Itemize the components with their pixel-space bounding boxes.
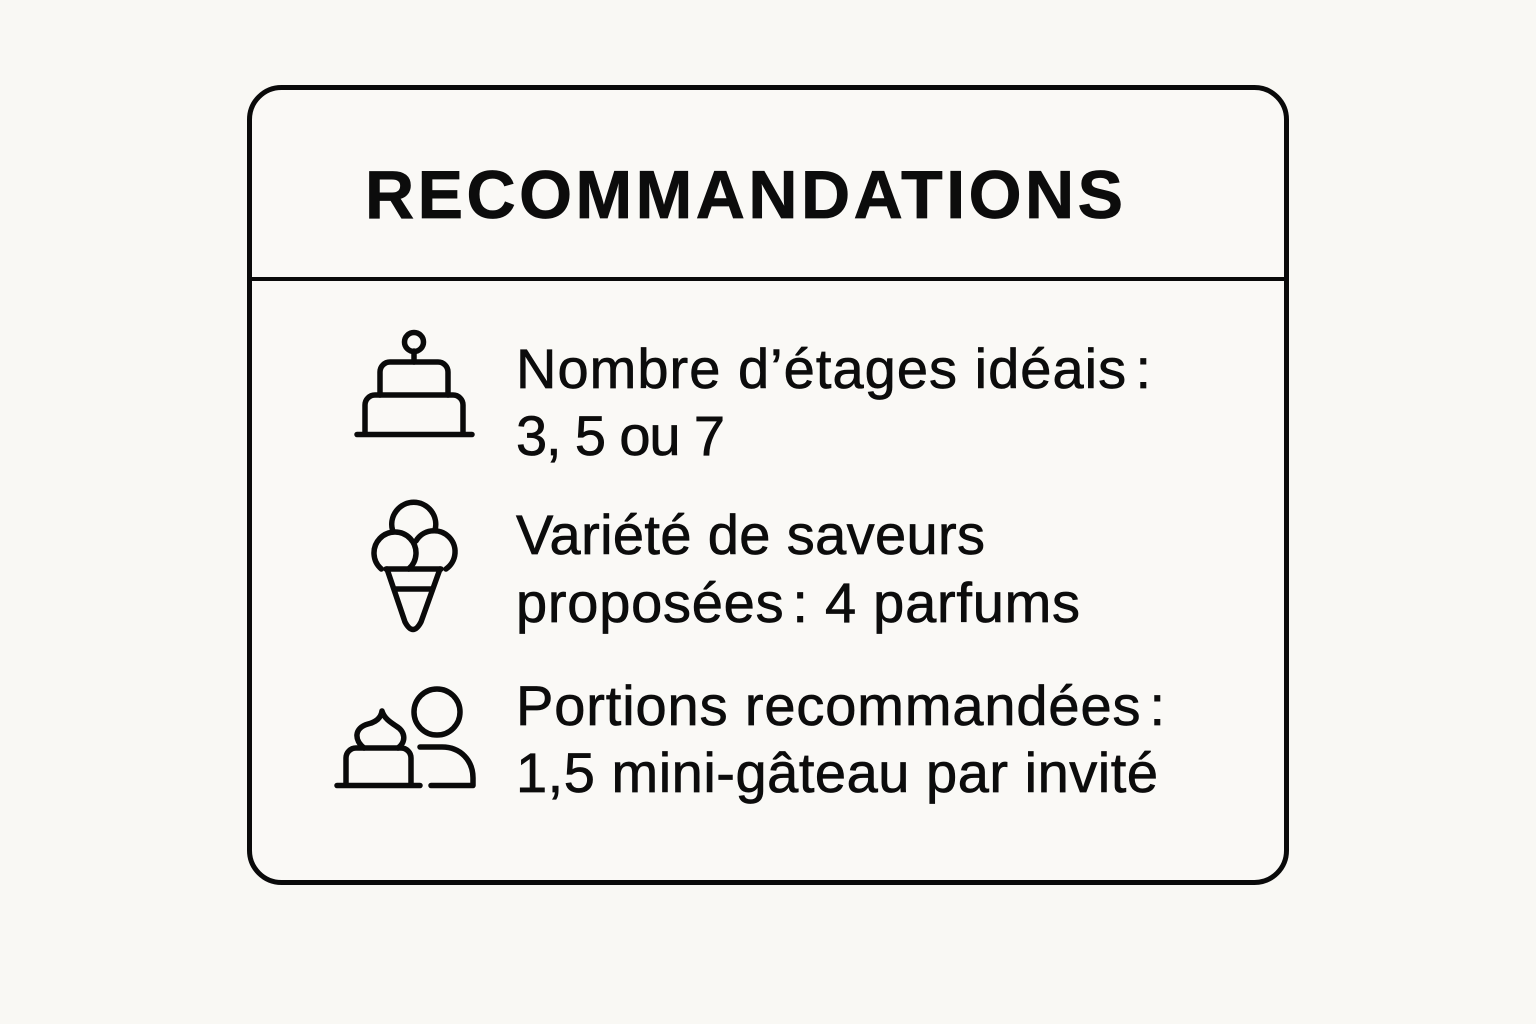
text: flavour variety: Variété de saveurs (516, 503, 985, 566)
text: number of tiers: Nombre d’étages idéais : (516, 337, 1151, 400)
title: RECOMMANDATIONS (365, 157, 1123, 233)
icon: mini cake and guest (337, 689, 473, 786)
text: recommended portions: Portions recommandées : (516, 674, 1165, 737)
icon: tiered cake (357, 332, 472, 434)
text: number of tiers (516, 337, 1151, 467)
text: recommended portions (516, 674, 1165, 804)
panel: recommandations card (250, 88, 1286, 882)
text: flavour variety (516, 503, 1080, 634)
text: number of tiers: 3, 5 ou 7 (516, 404, 725, 467)
text: flavour variety: proposées : 4 parfums (516, 571, 1080, 634)
text: recommended portions: 1,5 mini-gâteau par invité (516, 741, 1158, 804)
icon: ice cream cone (374, 502, 455, 630)
